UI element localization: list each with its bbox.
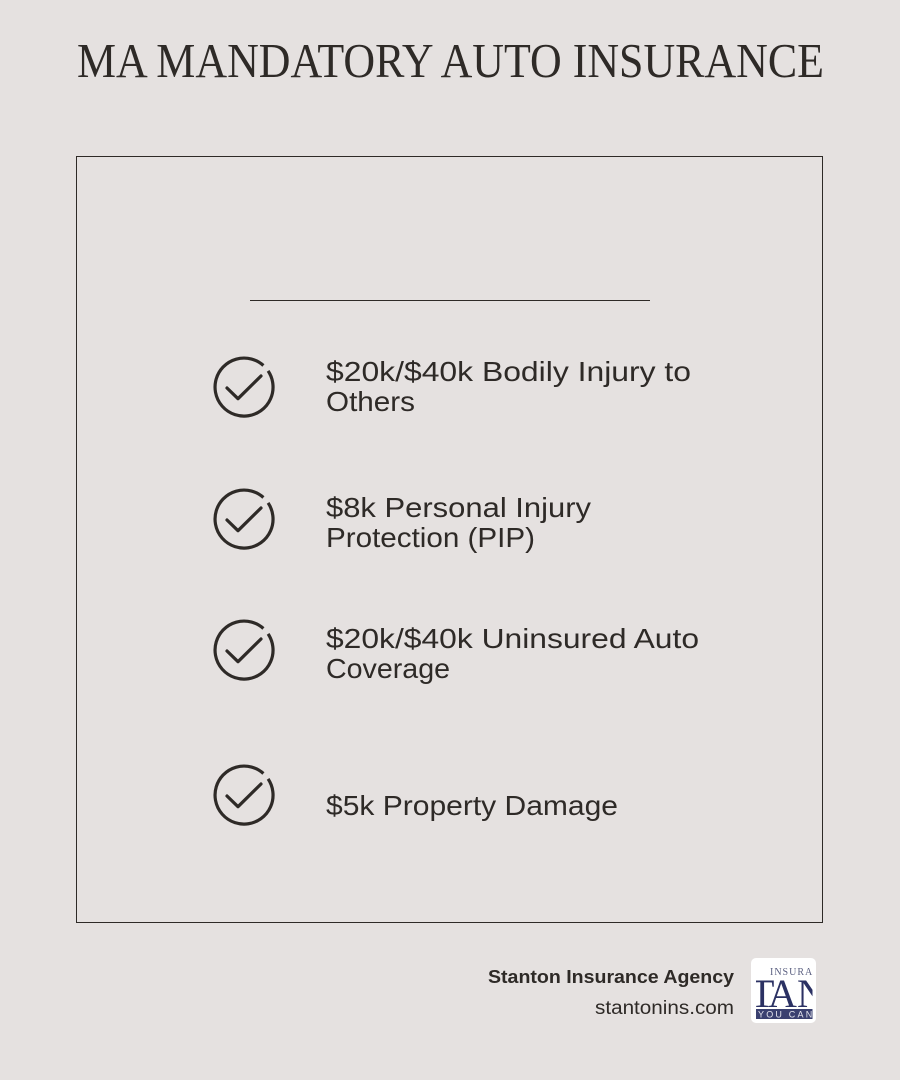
text: bodily injury xyxy=(326,356,691,417)
icon: check 3 xyxy=(215,621,273,679)
logo xyxy=(751,958,816,1023)
text: uninsured: $20k/$40k Uninsured Auto xyxy=(326,623,699,654)
text: PIP xyxy=(326,492,591,553)
footer: website: stantonins.com xyxy=(595,998,734,1019)
text: bodily injury: Others xyxy=(326,386,415,417)
text: uninsured xyxy=(326,623,699,684)
icon: check 2 xyxy=(215,490,273,548)
logo: YOU CAN xyxy=(758,1010,814,1020)
text: uninsured: Coverage xyxy=(326,653,450,684)
icon: check 4 xyxy=(215,766,273,824)
text: bodily injury: $20k/$40k Bodily Injury to xyxy=(326,356,691,387)
panel: coverage list xyxy=(76,156,822,922)
text: property damage: $5k Property Damage xyxy=(326,790,618,821)
logo: TAN xyxy=(750,971,826,1016)
logo: INSURANCE xyxy=(770,967,836,978)
footer: agency name: Stanton Insurance Agency xyxy=(488,966,735,987)
icon: check 1 xyxy=(215,358,273,416)
text: PIP: $8k Personal Injury xyxy=(326,492,591,523)
title: MA MANDATORY AUTO INSURANCE xyxy=(77,33,824,88)
text: PIP: Protection (PIP) xyxy=(326,522,535,553)
